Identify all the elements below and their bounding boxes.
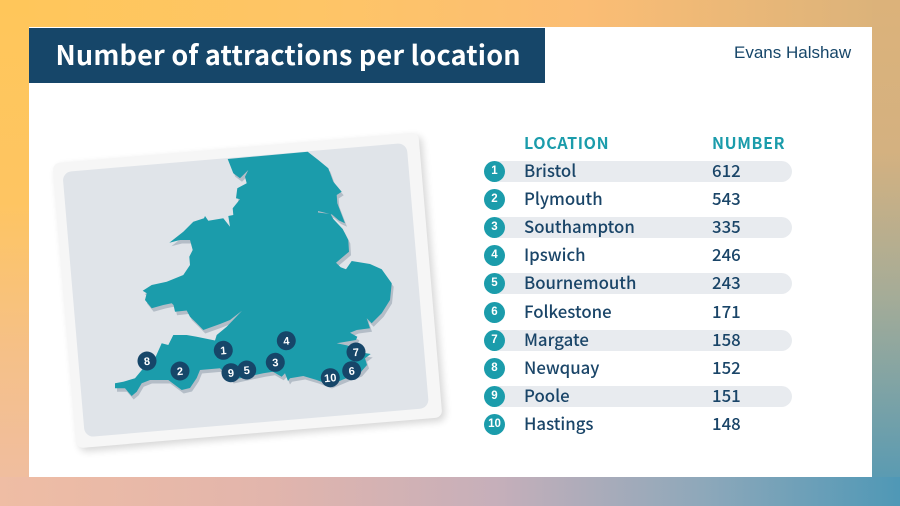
marker 6: 6 [348, 365, 355, 378]
title text: Number of attractions per location [56, 34, 521, 73]
row 3: Southampton: 335 [712, 214, 741, 238]
row 1: Bristol: 1 [491, 165, 498, 177]
row 9: Poole: Poole [524, 383, 570, 407]
marker 9 [221, 362, 241, 383]
row 7: Margate: Margate [524, 327, 589, 351]
row 8: Newquay [484, 355, 741, 379]
row 9: Poole: 151 [712, 383, 741, 407]
row 9: Poole: 9 [491, 390, 498, 402]
row 5: Bournemouth: 5 [491, 277, 498, 289]
row 2: Plymouth: 543 [712, 186, 741, 210]
row 6: Folkestone [484, 299, 741, 323]
row 8: Newquay: 8 [491, 362, 498, 374]
row 8: Newquay: Newquay [524, 355, 599, 379]
table header: number: NUMBER [712, 130, 785, 154]
map markers [137, 330, 366, 388]
marker 5: 5 [243, 365, 250, 377]
row 10: Hastings: Hastings [524, 411, 593, 435]
row 6: Folkestone: Folkestone [524, 299, 612, 323]
row 10: Hastings: 10 [488, 418, 501, 430]
row 2: Plymouth: 2 [491, 193, 498, 205]
row 4: Ipswich [484, 242, 741, 266]
row 7: Margate: 158 [712, 327, 741, 351]
row 2: Plymouth: Plymouth [524, 186, 603, 210]
marker 10 [320, 367, 341, 388]
title banner [29, 28, 545, 83]
row 9: Poole [484, 383, 792, 407]
marker 4: 4 [283, 335, 291, 348]
marker 2: 2 [177, 366, 184, 378]
row 1: Bristol: Bristol [524, 158, 576, 182]
row 5: Bournemouth: Bournemouth [524, 270, 636, 294]
row 4: Ipswich: Ipswich [524, 242, 586, 266]
row 4: Ipswich: 246 [712, 242, 741, 266]
row 1: Bristol: 612 [712, 158, 741, 182]
marker 4 [276, 330, 297, 351]
land: England and Wales [115, 152, 392, 396]
row 2: Plymouth [484, 186, 741, 210]
marker 6 [341, 360, 362, 381]
marker 5 [236, 360, 257, 380]
map card [53, 132, 446, 452]
marker 3: 3 [272, 357, 279, 370]
row 3: Southampton [484, 214, 792, 238]
marker 10: 10 [324, 372, 337, 385]
row 6: Folkestone: 6 [491, 306, 498, 318]
marker 7: 7 [353, 347, 360, 359]
marker 2 [170, 361, 190, 381]
row 7: Margate [484, 327, 792, 351]
row 3: Southampton: Southampton [524, 214, 635, 238]
marker 7 [346, 342, 366, 362]
marker 1 [213, 340, 234, 361]
row 1: Bristol [484, 158, 792, 182]
row 10: Hastings: 148 [712, 411, 741, 435]
row 5: Bournemouth [484, 270, 792, 294]
row 5: Bournemouth: 243 [712, 270, 741, 294]
row 3: Southampton: 3 [491, 221, 498, 233]
land shadow [117, 155, 394, 400]
row 7: Margate: 7 [491, 334, 498, 346]
row 8: Newquay: 152 [712, 355, 741, 379]
marker 3 [265, 352, 286, 373]
logo: Evans Halshaw: Evans Halshaw [734, 43, 851, 62]
marker 8 [137, 351, 157, 371]
marker 9: 9 [228, 367, 235, 380]
marker 1: 1 [220, 345, 227, 358]
row 6: Folkestone: 171 [712, 299, 741, 323]
row 4: Ipswich: 4 [491, 249, 498, 261]
marker 8: 8 [144, 356, 151, 368]
table header: location: LOCATION [524, 130, 609, 154]
row 10: Hastings [484, 411, 741, 435]
